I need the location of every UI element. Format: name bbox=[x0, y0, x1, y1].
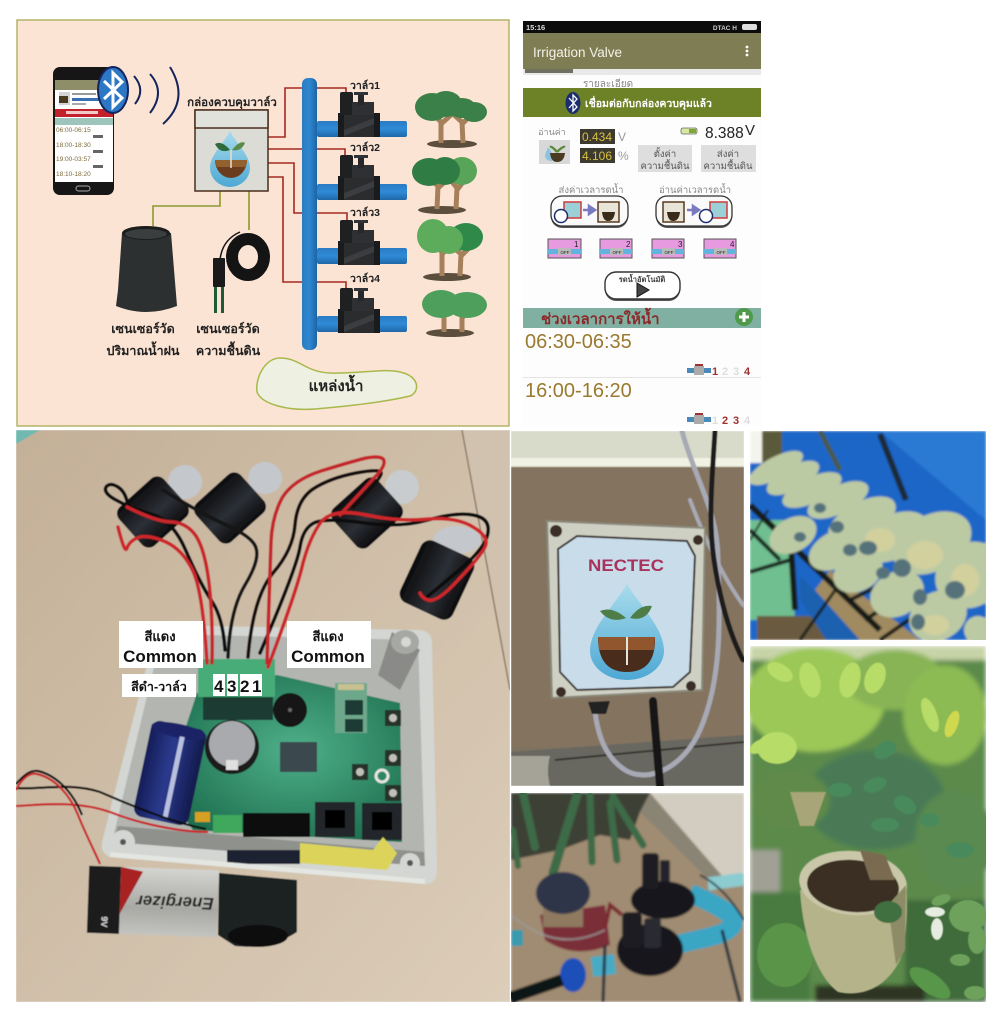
callout: black valve wire bbox=[122, 674, 196, 697]
valve toggle buttons: OFF bbox=[612, 250, 622, 255]
icon: smartphone with app: 18:00-18:30 bbox=[56, 142, 91, 149]
send time button bbox=[551, 183, 628, 228]
label: soil sensor: เซนเซอร์วัด bbox=[196, 321, 260, 336]
soil setting buttons: ความชื้นดิน bbox=[704, 159, 753, 172]
bottles bbox=[750, 448, 986, 640]
icon: smartphone with app: 06:00-06:15 bbox=[56, 127, 91, 134]
photo: valves and water meter bbox=[510, 793, 744, 1002]
schedule entry 1: 4 bbox=[744, 366, 751, 378]
callout: black valve wire: สีดำ-วาล์ว bbox=[131, 679, 187, 694]
app bar: Irrigation Valve bbox=[533, 45, 622, 60]
trees row 4 bbox=[422, 290, 487, 337]
cable gland bbox=[218, 873, 297, 947]
frame and sky bbox=[750, 431, 762, 463]
schedule entry 2: 16:00-16:20 bbox=[525, 380, 632, 402]
terminal numbers: 1 bbox=[252, 677, 261, 696]
photo: bottle planters under blue tarp bbox=[750, 431, 986, 640]
9V battery bbox=[87, 866, 219, 937]
photo: controller board with solenoids bbox=[16, 430, 510, 1002]
label: valve 2: วาล์ว2 bbox=[350, 141, 380, 154]
callout: left red common: Common bbox=[123, 647, 197, 666]
9V battery: Energizer bbox=[135, 891, 214, 913]
schedule entry 2: 2 bbox=[722, 415, 728, 427]
wall corner bbox=[650, 793, 744, 877]
schedule entry 1: 2 bbox=[722, 366, 728, 378]
schedule entry 1: 1 bbox=[712, 366, 718, 378]
label: water source: แหล่งน้ำ bbox=[309, 374, 363, 395]
shrub and leaves bbox=[511, 793, 650, 860]
schedule entry 1: 3 bbox=[733, 366, 739, 378]
label: controller box: กล่องควบคุมวาล์ว bbox=[187, 95, 277, 110]
schedule header bbox=[523, 307, 761, 328]
read time button: อ่านค่าเวลารดน้ำ bbox=[659, 183, 731, 196]
schedule header: ช่วงเวลาการให้น้ำ bbox=[541, 307, 660, 328]
schedule entry 2: 1 bbox=[712, 415, 718, 427]
label: valve 4: วาล์ว4 bbox=[350, 272, 380, 285]
callout: left red common bbox=[119, 621, 203, 668]
water source bbox=[257, 358, 417, 409]
leaf highlights bbox=[747, 658, 962, 764]
icon: smartphone with app: 19:00-03:57 bbox=[56, 156, 91, 163]
readings bbox=[538, 122, 755, 164]
status bar: DTAC H bbox=[713, 25, 737, 32]
readings: 8.388 bbox=[705, 125, 744, 142]
valve toggle buttons: OFF bbox=[664, 250, 674, 255]
callout: right red common bbox=[287, 621, 371, 668]
trees row 3 bbox=[417, 219, 483, 281]
valve 1 bbox=[338, 79, 380, 137]
terminal numbers: 3 bbox=[227, 677, 236, 696]
icon: bluetooth badge bbox=[98, 67, 128, 113]
sensor wires bbox=[153, 191, 249, 230]
valve 4 bbox=[338, 272, 380, 333]
lower bracket bbox=[227, 850, 300, 864]
valves bbox=[631, 881, 695, 919]
wall cables bbox=[595, 431, 743, 786]
soil setting buttons bbox=[638, 145, 756, 172]
blue pipes bbox=[680, 893, 733, 944]
schedule entry 1 bbox=[523, 331, 761, 378]
readings: อ่านค่า bbox=[538, 127, 566, 137]
main pot bbox=[800, 880, 907, 993]
valve toggle buttons: 1 bbox=[574, 240, 579, 249]
panel: irrigation system diagram bbox=[17, 20, 509, 426]
label: valve 1: วาล์ว1 bbox=[350, 79, 380, 92]
battery wires bbox=[16, 771, 208, 864]
circuit board bbox=[165, 659, 402, 842]
trees row 1 bbox=[415, 91, 487, 148]
label: details: รายละเอียด bbox=[583, 78, 633, 90]
label: rain sensor: เซนเซอร์วัด bbox=[111, 321, 175, 336]
send time button: ส่งค่าเวลารดน้ำ bbox=[559, 183, 623, 196]
controller box bbox=[195, 110, 268, 191]
label: soil sensor: ความชื้นดิน bbox=[196, 341, 261, 358]
9V battery: 9V bbox=[99, 916, 109, 928]
terminal numbers: 4 bbox=[214, 677, 224, 696]
valve toggle buttons: 3 bbox=[678, 240, 683, 249]
rain gauge sensor bbox=[116, 226, 177, 312]
terminal numbers bbox=[213, 674, 262, 696]
solenoids bbox=[113, 462, 481, 623]
schedule entry 2 bbox=[525, 380, 751, 427]
water main pipe bbox=[302, 78, 317, 350]
valve toggle buttons bbox=[548, 239, 736, 258]
soil setting buttons: ความชื้นดิน bbox=[641, 159, 690, 172]
foreground leaves bbox=[909, 894, 986, 1000]
red valve wires bbox=[268, 88, 347, 288]
icon: water drop with plant bbox=[210, 131, 250, 187]
panel: mobile app screenshot bbox=[523, 21, 761, 427]
valve 2 bbox=[338, 141, 380, 200]
status bar bbox=[523, 21, 761, 33]
sponge bbox=[300, 837, 397, 870]
connection status bar: เชื่อมต่อกับกล่องควบคุมแล้ว bbox=[585, 95, 712, 111]
callout: right red common: Common bbox=[291, 647, 365, 666]
readings: % bbox=[618, 149, 629, 163]
wall-mounted box bbox=[547, 521, 705, 698]
box label: NECTEC: NECTEC bbox=[588, 556, 664, 575]
readings: V bbox=[745, 122, 755, 139]
enclosure bbox=[102, 625, 437, 884]
callout: right red common: สีแดง bbox=[312, 629, 344, 644]
soil moisture sensor bbox=[213, 232, 264, 313]
auto watering play button: รดน้ำอัตโนมัติ bbox=[619, 273, 665, 284]
schedule entry 2: 3 bbox=[733, 415, 739, 427]
trees row 2 bbox=[412, 157, 477, 214]
readings: 0.434 bbox=[582, 130, 612, 144]
callout: left red common: สีแดง bbox=[144, 629, 176, 644]
device wires bbox=[105, 457, 488, 667]
label: rain sensor: ปริมาณน้ำฝน bbox=[107, 341, 180, 358]
schedule entry 2: 4 bbox=[744, 415, 751, 427]
readings: 4.106 bbox=[582, 149, 612, 163]
auto watering play button bbox=[605, 272, 680, 301]
status bar: 15:16 bbox=[526, 23, 545, 32]
valve toggle buttons: 2 bbox=[626, 240, 631, 249]
soil setting buttons: ตั้งค่า bbox=[654, 147, 676, 160]
water meter bbox=[540, 905, 610, 951]
icon: wireless signal arcs bbox=[134, 67, 179, 124]
connection status bar bbox=[523, 88, 761, 117]
capacitor bbox=[132, 718, 208, 827]
background pot bbox=[790, 792, 826, 826]
valve 3 bbox=[338, 206, 380, 265]
app bar bbox=[523, 33, 761, 69]
rack bbox=[750, 505, 920, 640]
read time button bbox=[656, 183, 732, 228]
readings: V bbox=[618, 130, 626, 144]
valve toggle buttons: OFF bbox=[716, 250, 726, 255]
photo: installed controller box on wall bbox=[511, 431, 744, 786]
valve toggle buttons: 4 bbox=[730, 240, 735, 249]
icon: smartphone with app: 18:10-18:20 bbox=[56, 171, 91, 178]
terminal numbers: 2 bbox=[240, 677, 249, 696]
lower-left backdrop bbox=[750, 520, 795, 620]
photo: potted plants bbox=[745, 646, 995, 1005]
label: valve 3: วาล์ว3 bbox=[350, 206, 380, 219]
soil setting buttons: ส่งค่า bbox=[717, 149, 739, 160]
schedule entry 1: 06:30-06:35 bbox=[525, 331, 632, 353]
branch pipes bbox=[317, 121, 407, 332]
icon: smartphone with app bbox=[53, 67, 114, 195]
valve toggle buttons: OFF bbox=[560, 250, 570, 255]
icon: soil sensor button bbox=[539, 140, 570, 164]
icon: box logo drop bbox=[590, 584, 664, 680]
